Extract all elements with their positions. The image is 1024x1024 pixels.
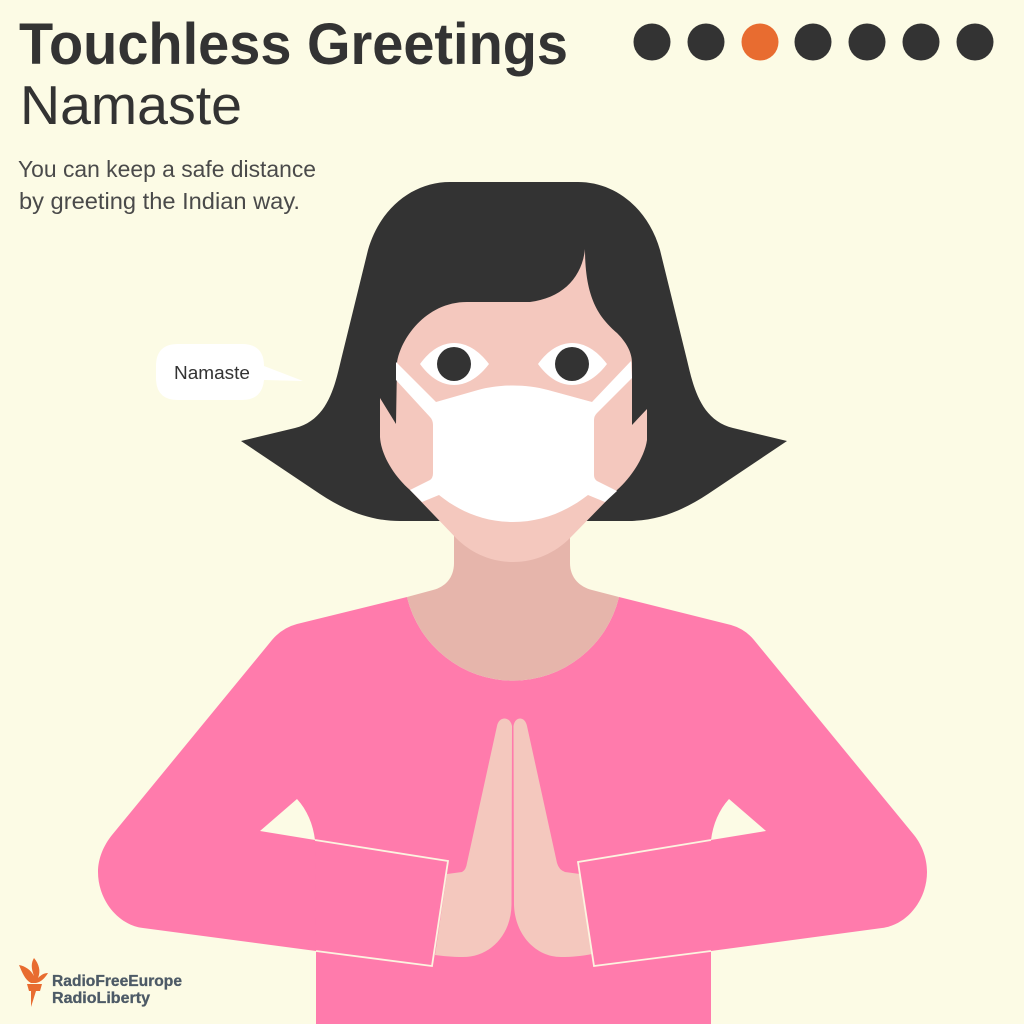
left eye <box>420 343 489 385</box>
speech bubble: Namaste <box>174 363 250 383</box>
logo <box>19 958 182 1007</box>
logo wordmark <box>52 973 182 1007</box>
gap under right arm <box>711 799 766 840</box>
logo wordmark: RadioLiberty <box>52 990 150 1007</box>
title: Touchless Greetings <box>19 12 568 77</box>
logo wordmark: RadioFreeEurope <box>52 973 182 990</box>
face <box>380 249 647 562</box>
logo torch icon <box>19 958 48 1007</box>
right hand <box>514 718 592 957</box>
neck <box>407 530 619 681</box>
right eye <box>538 343 607 385</box>
description text: by greeting the Indian way. <box>19 188 300 214</box>
progress dots <box>634 24 994 60</box>
left hand <box>435 718 512 957</box>
speech bubble <box>156 344 303 400</box>
description text <box>18 156 316 214</box>
face mask <box>396 361 632 522</box>
gap under left arm <box>260 799 315 840</box>
subtitle: Namaste <box>20 74 242 136</box>
description text: You can keep a safe distance <box>18 156 316 182</box>
left sleeve cuff <box>315 840 448 966</box>
praying hands <box>435 718 592 957</box>
right sleeve cuff <box>578 840 711 966</box>
shirt <box>98 597 927 1024</box>
hair <box>241 182 787 521</box>
shirt silhouette with arms <box>98 597 927 1024</box>
